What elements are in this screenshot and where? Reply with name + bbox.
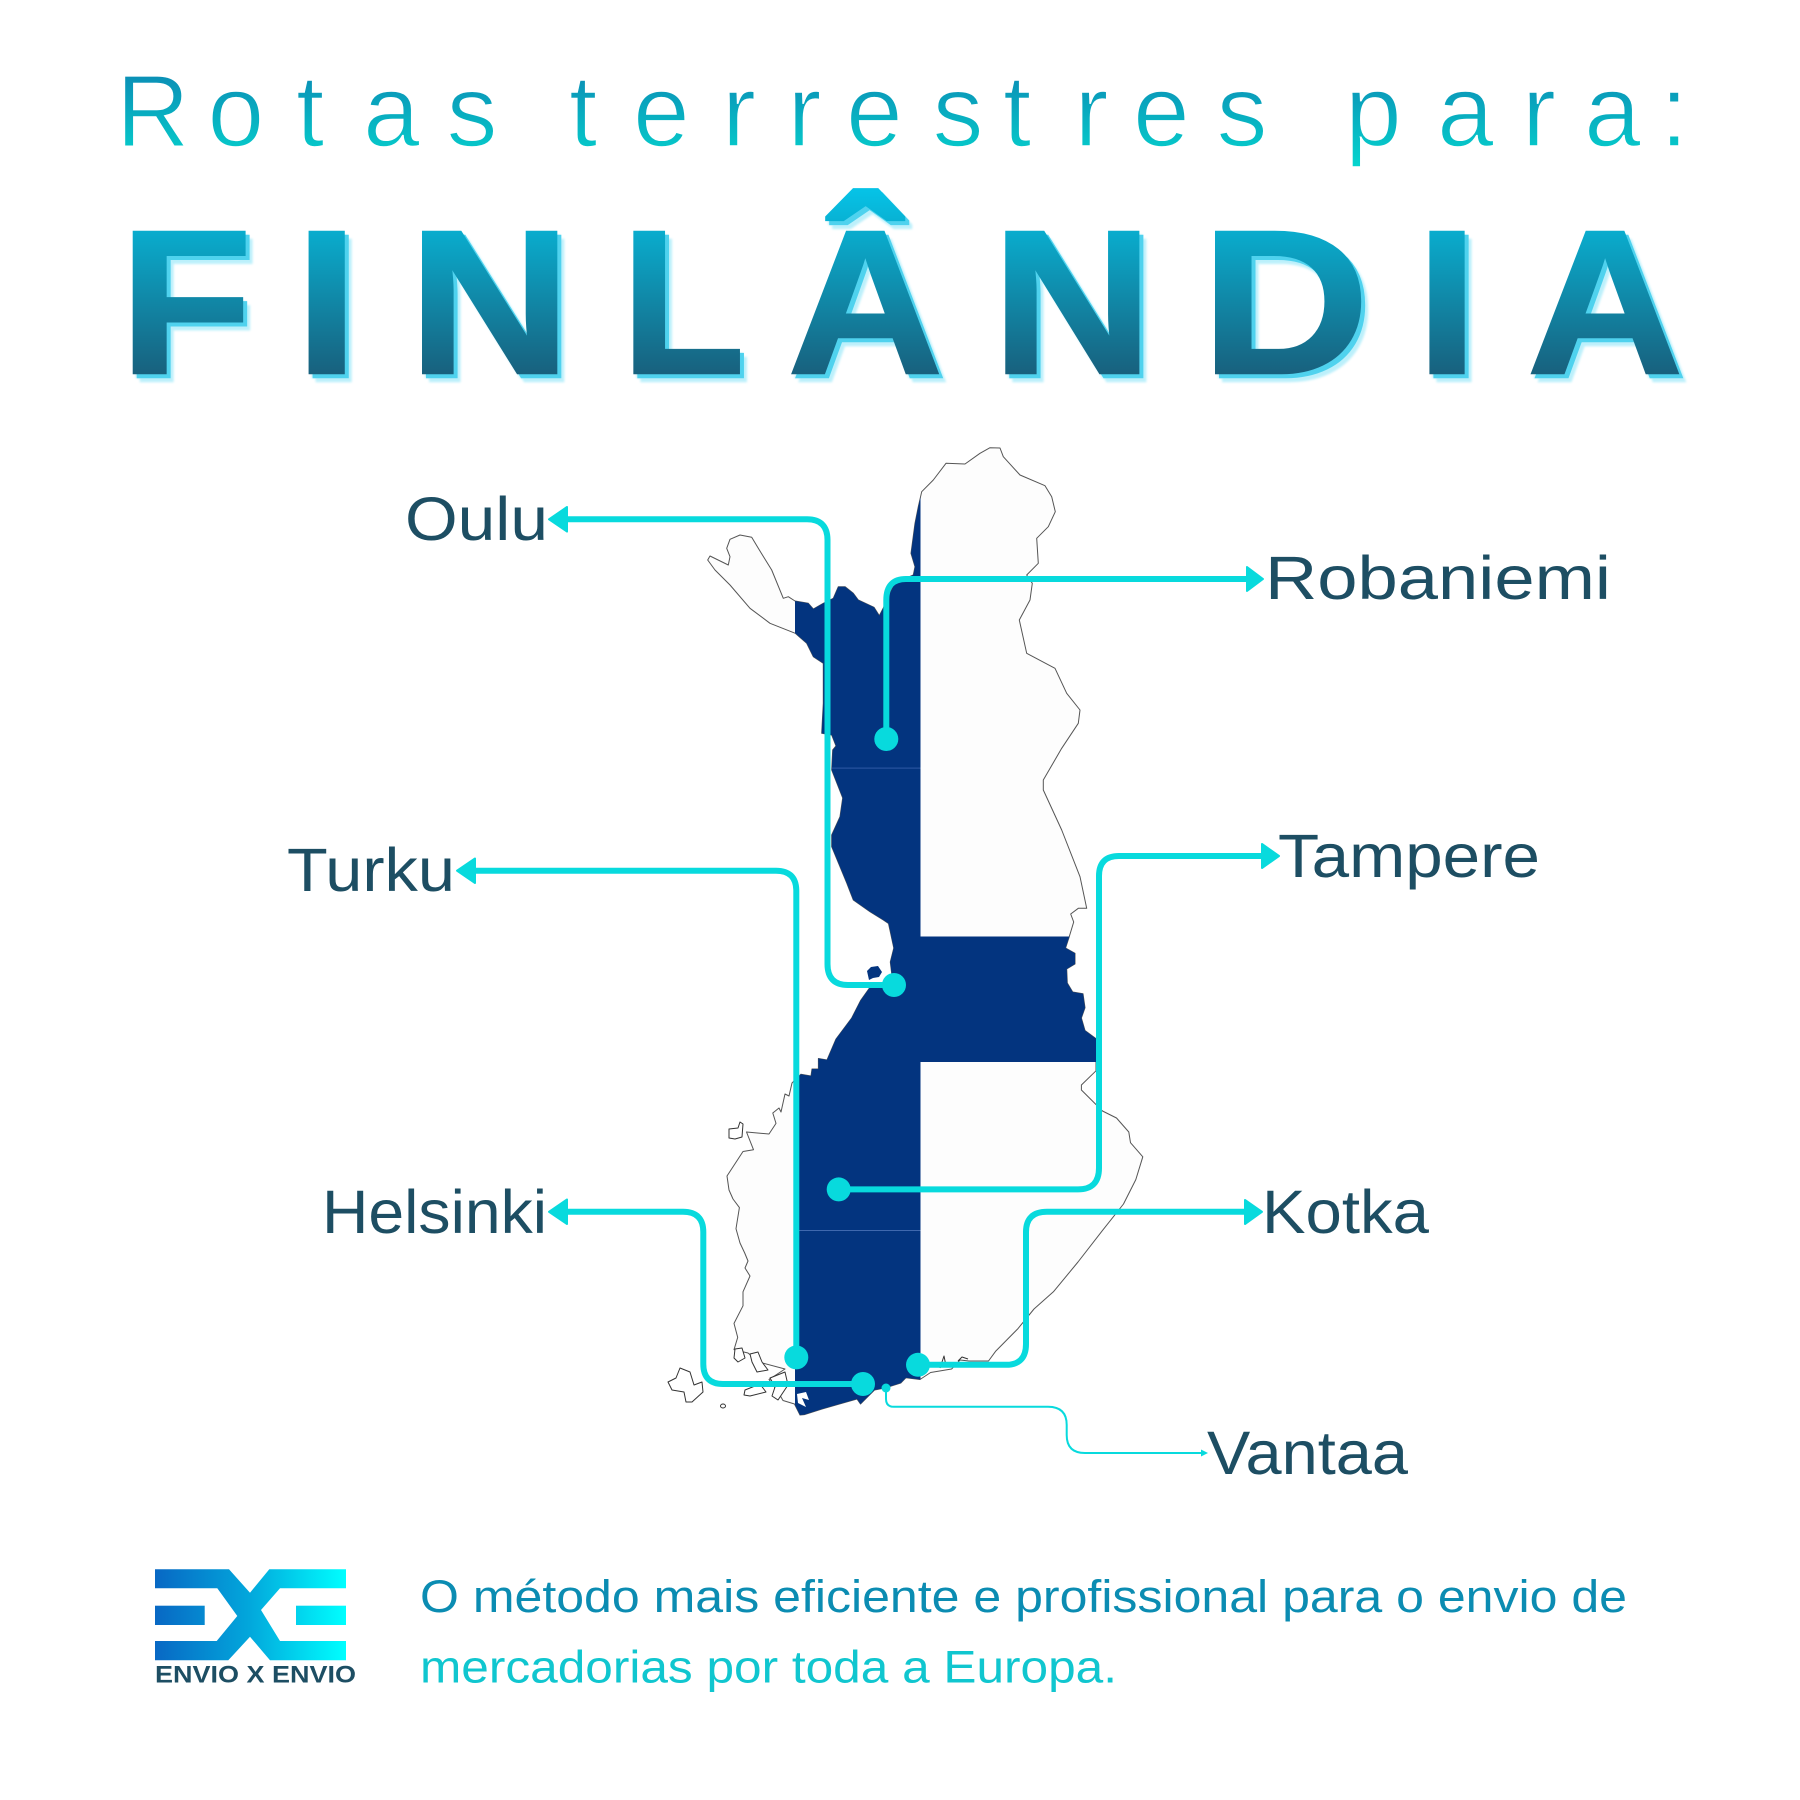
label: Robaniemi: Robaniemi: [1265, 544, 1611, 612]
connector: Vantaa route: [882, 1384, 1208, 1456]
label: Kotka: Kotka: [1262, 1178, 1429, 1246]
map: Finland with flag: [668, 430, 1143, 1430]
map: flag cross: [795, 498, 1096, 1415]
title: Rotas terrestres para: Rotas terrestres para:: [116, 54, 1688, 168]
city labels: [287, 485, 1611, 1487]
tagline: line 2: mercadorias por toda a Europa.: [420, 1642, 1117, 1693]
connector: Tampere route: [827, 844, 1279, 1201]
heading: FINLÂNDIA: F: [120, 188, 252, 417]
logo: EXE mark: [155, 1569, 346, 1660]
map: country outline: [708, 448, 1143, 1415]
logo: wordmark: ENVIO X ENVIO: [155, 1662, 356, 1689]
tagline: [420, 1571, 1627, 1693]
map: Aland islands: [668, 1122, 968, 1408]
tagline: line 1: O método mais eficiente e profissional para o envio de: [420, 1571, 1627, 1622]
heading: FINLÂNDIA: L: [621, 188, 745, 417]
heading: FINLÂNDIA: Â: [788, 188, 943, 417]
label: Helsinki: Helsinki: [322, 1178, 547, 1246]
heading: FINLÂNDIA: D: [1201, 187, 1370, 417]
heading: FINLÂNDIA: [120, 187, 1683, 417]
label: Turku: Turku: [287, 836, 455, 904]
map: island Hailuoto: [867, 966, 882, 980]
logo: Envio X Envio: [155, 1569, 356, 1689]
heading: FINLÂNDIA: N: [408, 187, 571, 417]
connector: Turku route: [457, 858, 808, 1369]
label: Tampere: Tampere: [1278, 822, 1540, 890]
map: southern inlets: [797, 1392, 809, 1407]
connector: Kotka route: [906, 1200, 1262, 1377]
heading: FINLÂNDIA: N: [992, 188, 1153, 417]
connector: Helsinki route: [549, 1200, 875, 1396]
connector: Oulu route: [549, 507, 906, 997]
heading: FINLÂNDIA: I: [1416, 187, 1478, 417]
heading: FINLÂNDIA: I: [294, 188, 359, 417]
heading: FINLÂNDIA: A: [1527, 187, 1683, 417]
label: Vantaa: Vantaa: [1207, 1419, 1408, 1487]
label: Oulu: Oulu: [405, 485, 548, 553]
connector: Robaniemi route: [874, 567, 1263, 751]
